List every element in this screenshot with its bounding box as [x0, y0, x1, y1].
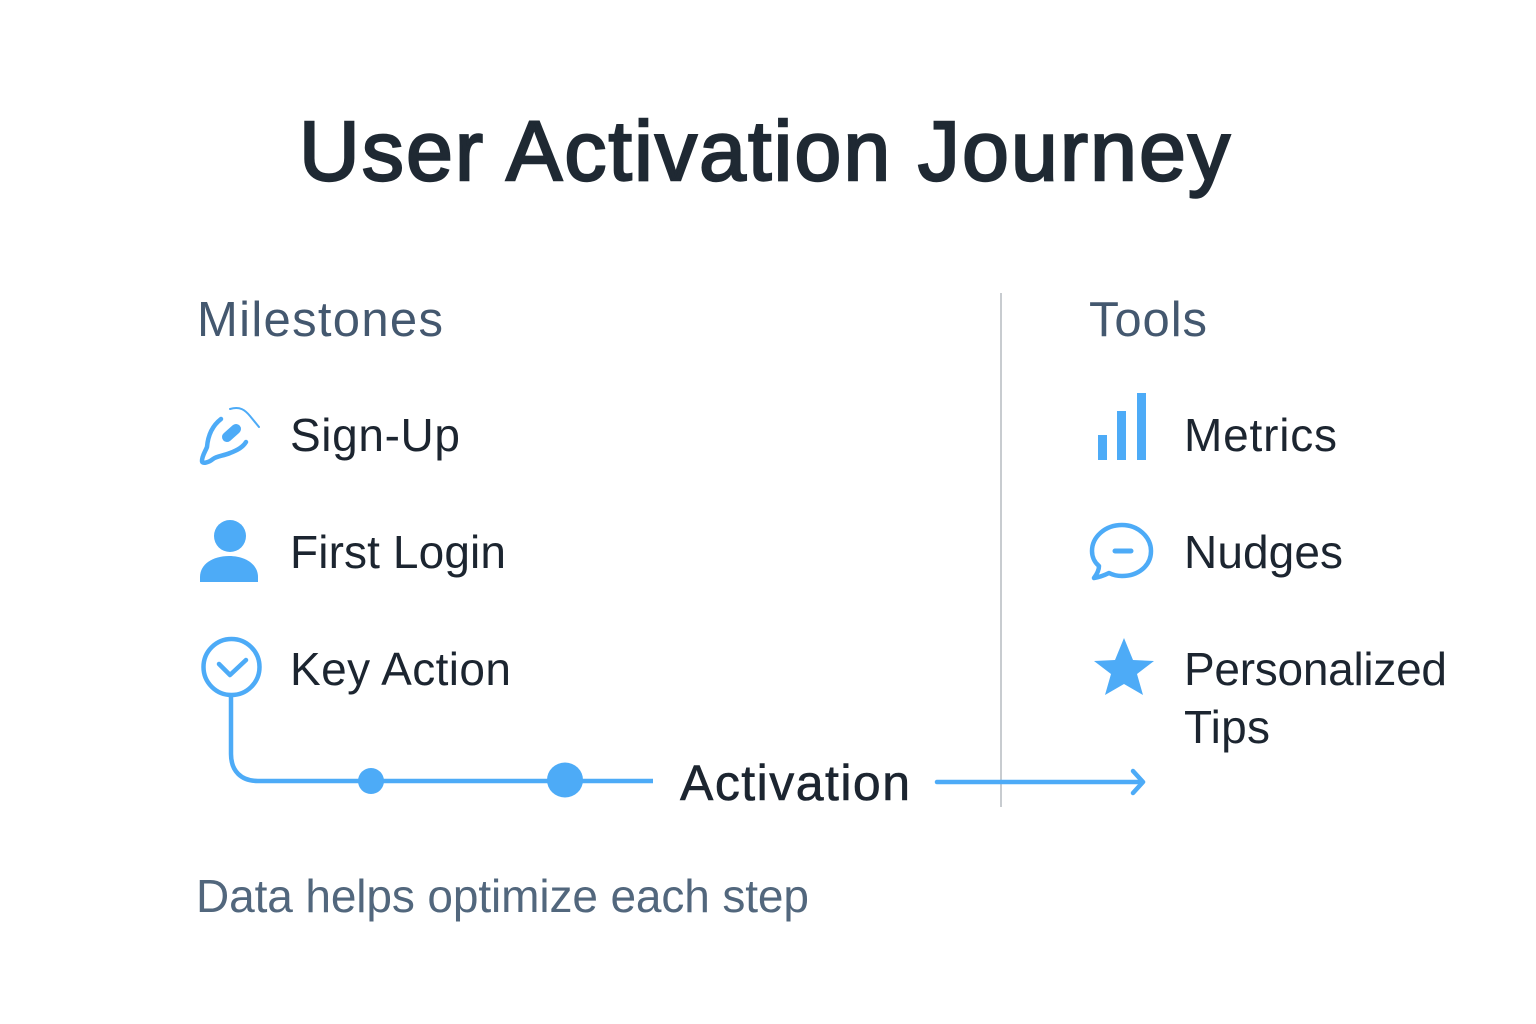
label: sign-up: Sign-Up [290, 409, 460, 461]
label: personalized tips: Personalized [1184, 643, 1447, 695]
icon: sign-up pen [202, 408, 259, 463]
connector line [231, 695, 653, 781]
milestone dot small [358, 768, 384, 794]
panel: tools [1089, 293, 1447, 753]
label: key action: Key Action [290, 643, 511, 695]
panel: milestones [197, 293, 511, 695]
footer note: Data helps optimize each step [196, 870, 809, 922]
icon: check circle [204, 639, 260, 695]
icon: user [200, 520, 258, 582]
icon: metrics bars [1098, 393, 1146, 460]
heading: tools: Tools [1089, 293, 1207, 347]
label: personalized tips [1184, 643, 1447, 753]
label: personalized tips: Tips [1184, 701, 1270, 753]
label: first login: First Login [290, 526, 506, 578]
milestone dot large [547, 762, 583, 798]
arrow [937, 771, 1143, 793]
label: metrics: Metrics [1184, 409, 1337, 461]
icon: nudges speech bubble [1092, 525, 1151, 578]
label: activation: Activation [680, 755, 910, 811]
label: nudges: Nudges [1184, 526, 1343, 578]
heading: milestones: Milestones [197, 293, 443, 347]
title: User Activation Journey [299, 104, 1230, 198]
activation path [231, 695, 1143, 811]
icon: star [1094, 638, 1154, 695]
